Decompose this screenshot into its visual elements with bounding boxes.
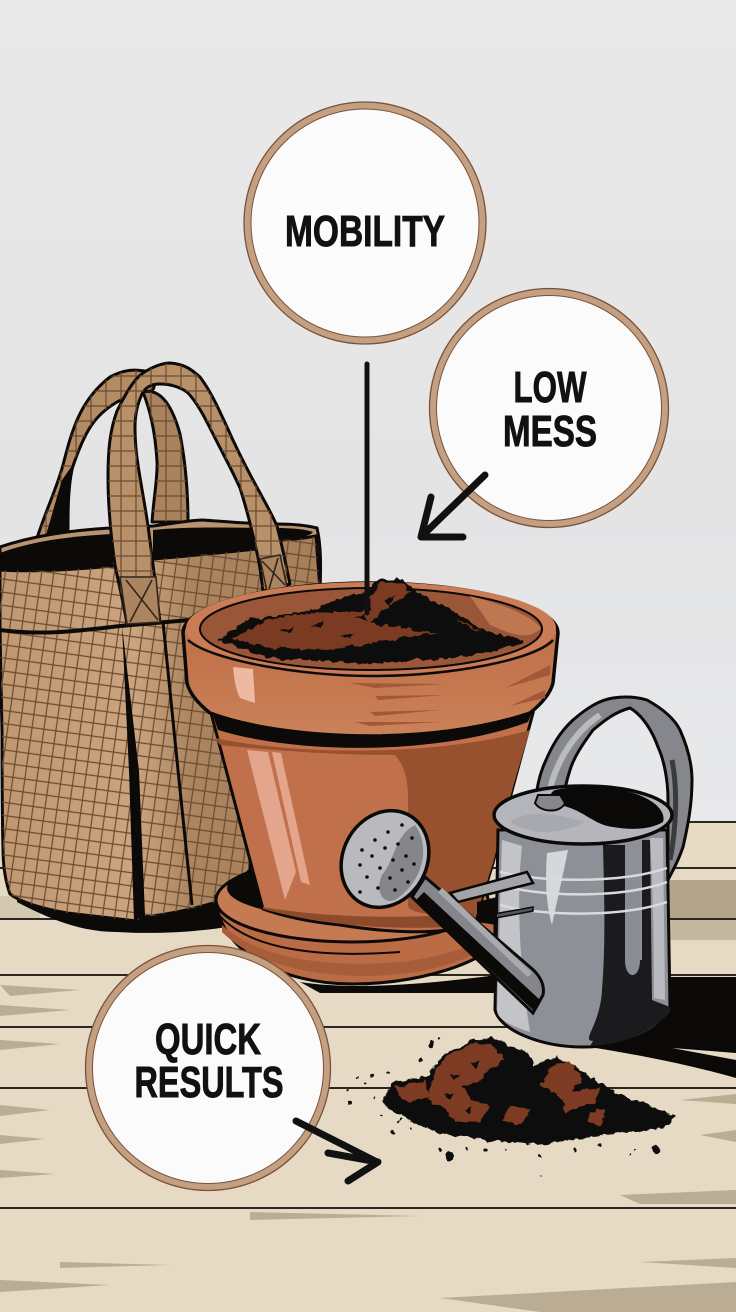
wood grain xyxy=(0,985,736,1312)
pot body xyxy=(211,713,533,932)
rose head xyxy=(324,795,446,923)
bag rim and interior xyxy=(0,520,321,640)
stitched handle base patches xyxy=(120,555,287,624)
pot shading xyxy=(215,730,530,923)
bag shadow on table xyxy=(17,895,240,933)
circle: quick results: RESULTS xyxy=(134,1058,284,1107)
arrow: low mess to pot xyxy=(421,475,485,537)
tote bag xyxy=(0,363,321,921)
saucer xyxy=(216,858,495,984)
pot highlights xyxy=(247,750,296,900)
circle: mobility xyxy=(244,102,486,344)
soil pile xyxy=(347,1038,675,1176)
back handle xyxy=(37,370,188,538)
watering can xyxy=(324,697,692,1047)
circle: low mess xyxy=(430,288,668,528)
stake line from mobility xyxy=(364,364,370,613)
circle: low mess: MESS xyxy=(503,407,597,456)
can body xyxy=(495,830,670,1047)
circle: quick results: QUICK xyxy=(155,1015,261,1064)
pot rim xyxy=(183,583,558,736)
circle: mobility: MOBILITY xyxy=(285,207,445,256)
terracotta pot xyxy=(183,580,558,932)
rim streaks and highlights xyxy=(350,665,550,726)
bag seams and straps xyxy=(0,620,190,633)
soil xyxy=(220,580,523,663)
wooden table xyxy=(0,822,736,1312)
wall background xyxy=(0,0,736,830)
arrow: quick results to soil xyxy=(296,1121,378,1181)
circle: low mess: LOW xyxy=(514,363,587,412)
table shadows xyxy=(300,975,510,993)
spout xyxy=(412,877,543,1013)
spout brace xyxy=(450,872,533,902)
rim inner wall xyxy=(200,588,542,670)
bag body xyxy=(0,536,320,921)
front handle xyxy=(108,363,290,624)
circle: quick results xyxy=(86,946,330,1190)
rim under-shadow xyxy=(212,712,532,748)
can top rim xyxy=(494,786,672,844)
can handle xyxy=(535,697,692,880)
